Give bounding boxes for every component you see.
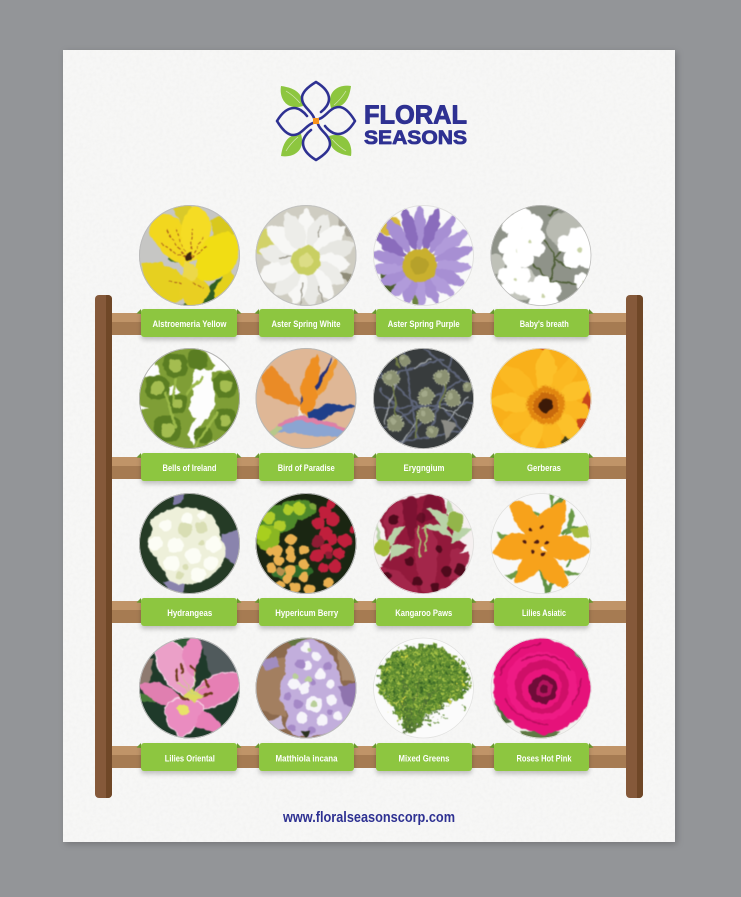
label: Kangaroo Paws (372, 598, 476, 626)
label: Bird of Paradise: Bird of Paradise (278, 463, 335, 474)
label: Bells of Ireland (136, 453, 242, 481)
label: Roses Hot Pink: Roses Hot Pink (516, 754, 572, 765)
label: Baby's breath (490, 309, 594, 337)
flower outline: Matthiola incana (256, 638, 356, 738)
flower outline: Bird of Paradise (256, 348, 356, 448)
logo wordmark: SEASONS: SEASONS (364, 127, 467, 149)
right post (626, 295, 643, 798)
flower: Mixed Greens (376, 642, 472, 734)
label: Hypericum Berry (254, 598, 358, 626)
flower: Lilies Oriental (139, 638, 240, 738)
flower outline: Hydrangeas (140, 494, 240, 594)
label: Alstroemeria Yellow (136, 309, 242, 337)
flower: Erygngium (373, 348, 474, 449)
shelf rail 4 (112, 746, 626, 768)
left post (95, 295, 112, 798)
label: Hypericum Berry: Hypericum Berry (275, 608, 339, 619)
flower outline: Erygngium (374, 348, 474, 448)
shelf rail 2 (112, 457, 626, 479)
flower outline: Roses Hot Pink (491, 638, 591, 738)
label: Lilies Oriental: Lilies Oriental (165, 754, 215, 765)
label: Bells of Ireland: Bells of Ireland (162, 463, 217, 474)
label: Kangaroo Paws: Kangaroo Paws (395, 608, 452, 619)
flower outline: Mixed Greens (374, 638, 474, 738)
label: Alstroemeria Yellow: Alstroemeria Yellow (152, 319, 227, 330)
shelf rack (95, 295, 643, 798)
flower: Bird of Paradise (256, 348, 356, 449)
flower outline: Gerberas (491, 348, 591, 448)
label: Lilies Asiatic: Lilies Asiatic (522, 608, 566, 619)
flower: Kangaroo Paws (373, 493, 472, 594)
label: Lilies Asiatic (490, 598, 594, 626)
label: Matthiola incana: Matthiola incana (276, 754, 338, 765)
label: Baby's breath: Baby's breath (520, 319, 569, 330)
label: Mixed Greens (372, 743, 476, 771)
label: Aster Spring Purple: Aster Spring Purple (388, 319, 460, 330)
label: Aster Spring White (254, 309, 358, 337)
label: Bird of Paradise (254, 453, 358, 481)
label: Erygngium: Erygngium (404, 463, 444, 474)
logo: Floral Seasons (277, 82, 467, 160)
label: Mixed Greens: Mixed Greens (398, 754, 450, 765)
flower outline: Alstroemeria Yellow (140, 206, 240, 306)
label: Lilies Oriental (136, 743, 242, 771)
flower: Hydrangeas (139, 493, 240, 594)
shelf rail 1 (112, 313, 626, 335)
flower: Gerberas (490, 348, 592, 449)
label: Matthiola incana (254, 743, 358, 771)
flower: Aster Spring White (256, 205, 356, 306)
flower outline: Aster Spring White (256, 206, 356, 306)
shelf rail 3 (112, 601, 626, 623)
logo wordmark: FLORAL: FLORAL (364, 102, 467, 130)
label: Gerberas (490, 453, 594, 481)
label: Aster Spring Purple (372, 309, 476, 337)
flower outline: Baby's breath (491, 206, 591, 306)
flower outline: Bells of Ireland (140, 348, 240, 448)
flower: Roses Hot Pink (492, 638, 592, 738)
label: Gerberas: Gerberas (527, 463, 561, 474)
flower: Alstroemeria Yellow (139, 205, 240, 306)
label: Hydrangeas (136, 598, 242, 626)
flower: Bells of Ireland (139, 348, 240, 449)
label: Roses Hot Pink (490, 743, 594, 771)
flower outline: Lilies Oriental (140, 638, 240, 738)
flower: Matthiola incana (256, 638, 356, 738)
flower outline: Hypericum Berry (256, 494, 356, 594)
flower outline: Lilies Asiatic (491, 494, 591, 594)
paper sheet (63, 50, 675, 842)
website URL: www.floralseasonscorp.com (282, 810, 455, 826)
flower outline: Aster Spring Purple (374, 206, 474, 306)
label: Aster Spring White: Aster Spring White (272, 319, 340, 330)
flower: Lilies Asiatic (492, 494, 590, 594)
label: Erygngium (372, 453, 476, 481)
flower: Aster Spring Purple (373, 205, 474, 306)
label: Hydrangeas: Hydrangeas (167, 608, 212, 619)
flower outline: Kangaroo Paws (374, 494, 474, 594)
flower: Baby's breath (490, 205, 590, 305)
logo icon: flower (277, 82, 355, 160)
flower: Hypericum Berry (256, 493, 356, 594)
